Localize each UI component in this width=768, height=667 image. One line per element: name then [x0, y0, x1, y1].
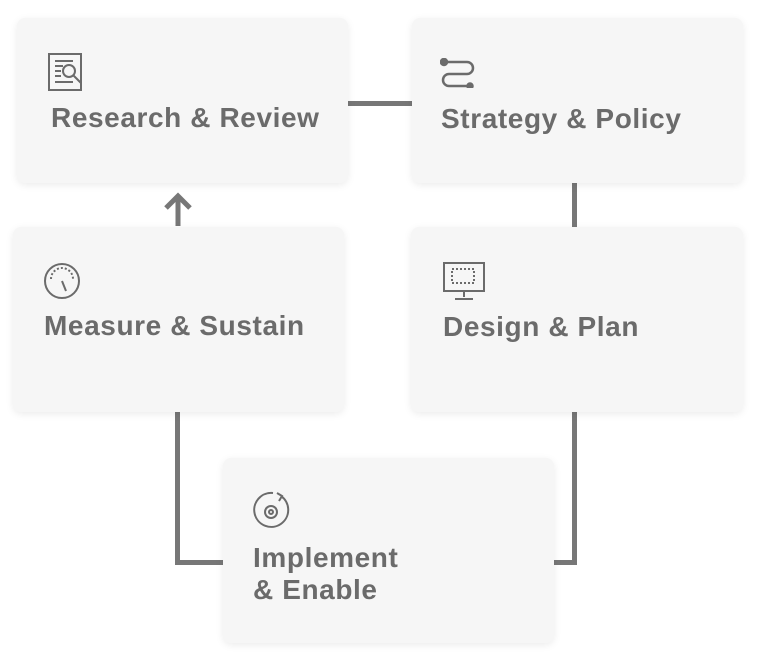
panel: strategy & policy [412, 18, 743, 183]
heading: Strategy & Policy [441, 103, 682, 134]
heading [253, 542, 398, 605]
heading: Measure & Sustain [44, 310, 305, 341]
icon: document search [48, 53, 82, 91]
icon: gear cycle [253, 492, 290, 528]
panel: design & plan [411, 227, 743, 412]
icon: route [440, 58, 474, 88]
heading: Research & Review [51, 102, 320, 133]
arrow: up to research [164, 192, 192, 226]
panel: research & review [17, 18, 348, 183]
heading: & Enable [253, 574, 378, 605]
panel: implement & enable [223, 458, 554, 643]
icon: gauge [44, 263, 80, 299]
heading: Design & Plan [443, 311, 639, 342]
icon: monitor [443, 262, 485, 300]
panel: measure & sustain [13, 227, 344, 412]
heading: Implement [253, 542, 398, 573]
